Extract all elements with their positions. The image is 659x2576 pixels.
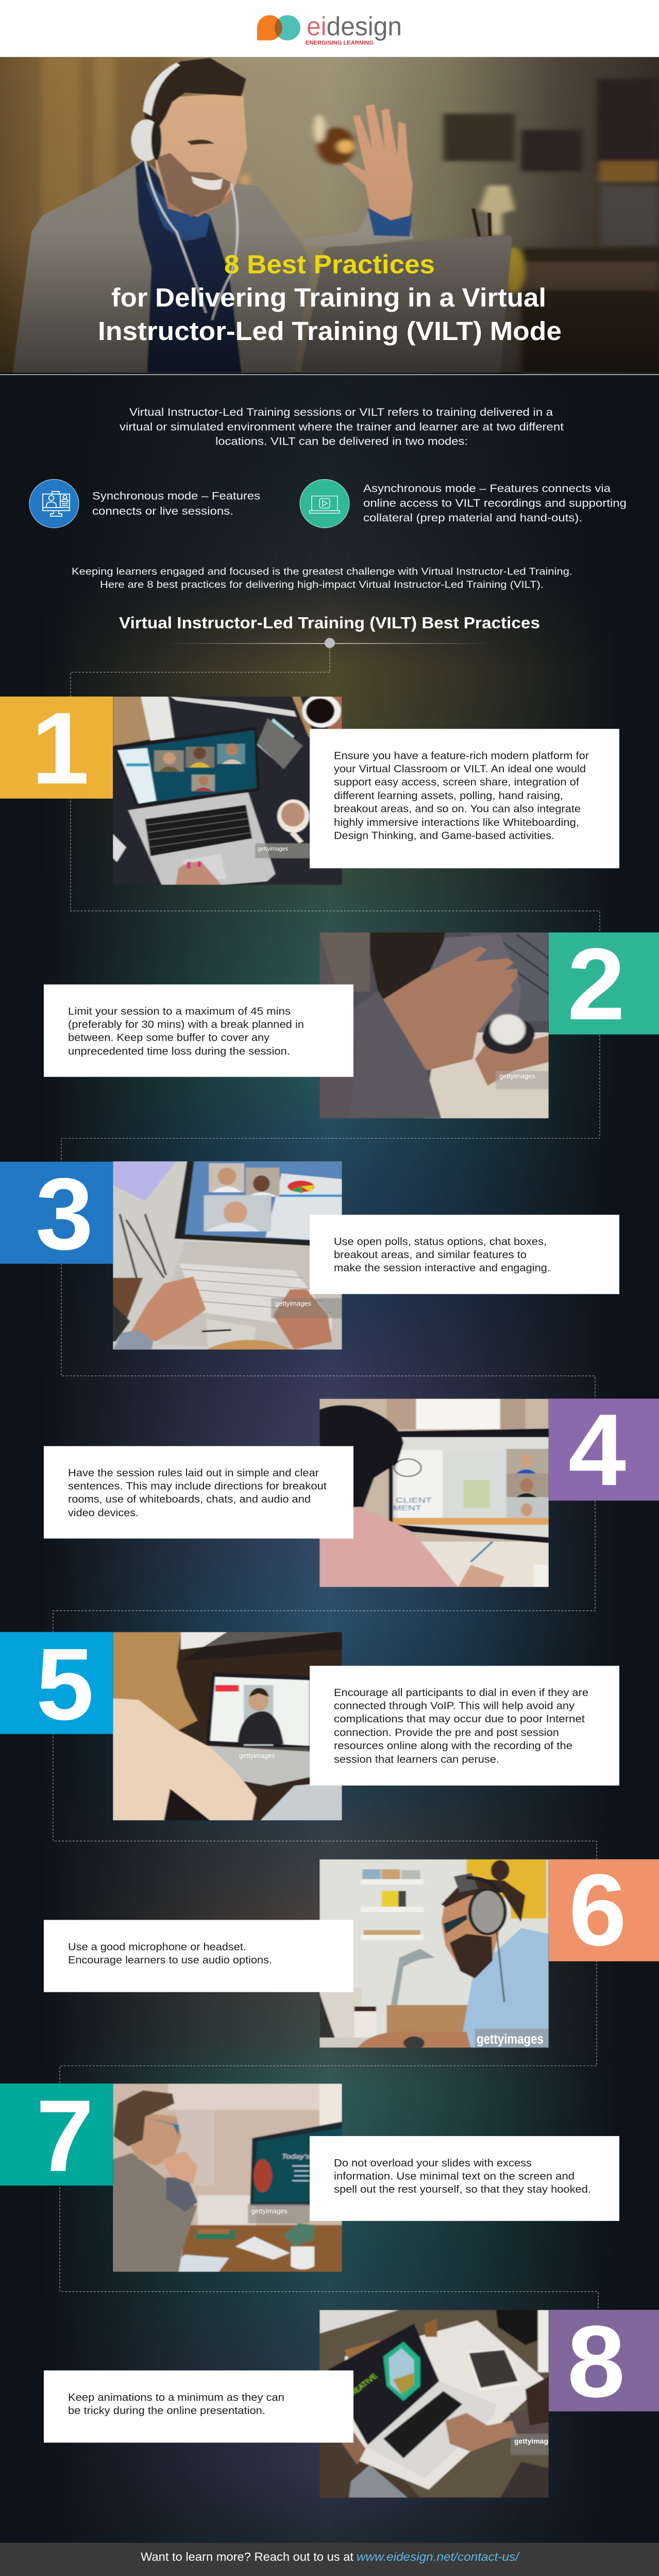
text card 5 — [310, 1666, 619, 1786]
text card 1: support easy access, screen share, integration of — [334, 776, 579, 788]
text card 4 — [44, 1446, 353, 1538]
text card 1: highly immersive interactions like Whiteboarding, — [334, 817, 579, 828]
intro text: Virtual Instructor-Led Training sessions or VILT refers to training delivered in a — [129, 405, 553, 418]
photo: smiling man with headset at laptop: gettyimages — [477, 2032, 544, 2047]
intro text — [120, 405, 564, 448]
jacket — [12, 160, 311, 372]
logo: eidesign: ENERGISING LEARNING — [306, 40, 374, 46]
panel 4 — [44, 1393, 659, 1587]
icon: laptop with play button — [300, 479, 349, 528]
text: asynchronous: collateral (prep material and hand-outs). — [363, 511, 582, 524]
asynchronous mode — [300, 479, 627, 528]
photo: man with glasses looking at monitor: Today's Dis — [282, 2154, 325, 2161]
photo: hand and wristwatch: gettyimages — [499, 1072, 535, 1080]
text card 5: connection. Provide the pre and post session — [334, 1727, 559, 1739]
photo: woman at monitor with whiteboard call — [319, 1399, 549, 1587]
panel 1 — [0, 691, 619, 885]
title — [98, 249, 562, 346]
engagement text: Here are 8 best practices for delivering high-impact Virtual Instructor-Led Training (VILT). — [100, 579, 544, 590]
text card 7: spell out the rest yourself, so that they stay hooked. — [334, 2183, 591, 2195]
photo: overhead laptop with presentation on white table: REATIVE — [348, 2372, 380, 2397]
panel 8 — [44, 2305, 659, 2498]
number badge 3: 3 — [36, 1157, 93, 1271]
text card 2: Limit your session to a maximum of 45 mins — [68, 1006, 291, 1018]
number badge 5 — [0, 1628, 113, 1741]
photo: smiling man with headset at laptop — [319, 1859, 549, 2049]
text card 5: connected through VoIP. This will help avoid any — [334, 1700, 575, 1712]
text card 8 — [44, 2370, 353, 2443]
text card 6 — [44, 1920, 353, 1992]
text card 8: be tricky during the online presentation. — [68, 2404, 265, 2416]
photo: woman watching recorded presenter on laptop — [113, 1632, 342, 1820]
footer bar: www.eidesign.net/contact-us/ — [357, 2550, 520, 2564]
hero bottom rule — [0, 374, 659, 375]
photo: man with glasses looking at monitor — [113, 2083, 342, 2272]
number badge 8 — [549, 2305, 659, 2419]
headphones — [143, 63, 180, 116]
number badge 5: 5 — [36, 1628, 94, 1741]
photo: woman at monitor with whiteboard call: MENT — [393, 1504, 421, 1512]
text card 3 — [310, 1215, 619, 1294]
title: for Delivering Training in a Virtual — [111, 283, 546, 312]
photo: laptop video call on desk: gettyimages — [258, 846, 289, 852]
engagement text: Keeping learners engaged and focused is the greatest challenge with Virtual Instructor-Led Training. — [72, 566, 572, 578]
number badge 2: 2 — [567, 927, 625, 1041]
photo: man with glasses looking at monitor: gettyimages — [251, 2207, 288, 2215]
number badge 7 — [0, 2079, 113, 2193]
text: synchronous: Synchronous mode – Features — [92, 489, 260, 502]
text card 3: make the session interactive and engaging. — [334, 1262, 550, 1274]
photo: overhead laptop with presentation on white table: gettyimage — [514, 2437, 552, 2445]
text card 6: Encourage learners to use audio options. — [68, 1954, 272, 1966]
text card 1 — [310, 729, 619, 868]
text card 2: between. Keep some buffer to cover any — [68, 1032, 270, 1044]
pens — [471, 209, 481, 236]
text card 4: rooms, use of whiteboards, chats, and audio and — [68, 1494, 311, 1505]
title: Instructor-Led Training (VILT) Mode — [98, 316, 562, 346]
title: 8 Best Practices — [224, 249, 435, 279]
text card 4: sentences. This may include directions for breakout — [68, 1480, 327, 1492]
text: asynchronous: Asynchronous mode – Features connects via — [363, 482, 611, 495]
text: asynchronous: online access to VILT recordings and supporting — [363, 497, 627, 509]
text card 7: Do not overload your slides with excess — [334, 2157, 532, 2169]
logo: eidesign — [257, 11, 402, 46]
panel 7 — [0, 2079, 619, 2272]
number badge 4 — [549, 1393, 659, 1507]
number badge 6 — [549, 1853, 659, 1967]
text card 1: Ensure you have a feature-rich modern platform for — [334, 750, 589, 761]
engagement text — [72, 566, 572, 590]
panel 5 — [0, 1628, 619, 1820]
text card 7 — [310, 2136, 619, 2221]
text card 5: session that learners can peruse. — [334, 1754, 499, 1766]
photo: laptop with group video call and pie chart — [113, 1161, 342, 1350]
logo: eidesign: eidesign — [307, 11, 402, 41]
text card 6: Use a good microphone or headset. — [68, 1941, 246, 1953]
laptop back — [300, 235, 512, 372]
text card 3: breakout areas, and similar features to — [334, 1249, 527, 1261]
footer bar: Want to learn more? Reach out to us at — [141, 2550, 353, 2564]
text card 5: complications that may occur due to poor Internet — [334, 1713, 585, 1725]
text card 2: (preferably for 30 mins) with a break planned in — [68, 1019, 304, 1030]
icon: video call monitor — [29, 479, 79, 528]
number badge 8: 8 — [567, 2305, 625, 2419]
panel 3 — [0, 1157, 619, 1350]
number badge 3 — [0, 1157, 113, 1271]
hand — [343, 104, 413, 221]
text card 2: unprecedented time loss during the session. — [68, 1045, 290, 1057]
photo: hand and wristwatch — [319, 931, 549, 1139]
text: synchronous: connects or live sessions. — [92, 504, 233, 517]
text: asynchronous — [363, 482, 627, 524]
hero photo: man with headphones waving — [0, 57, 659, 374]
text card 1: breakout areas, and so on. You can also integrate — [334, 803, 581, 815]
number badge 1: 1 — [31, 691, 89, 805]
number badge 6: 6 — [569, 1853, 627, 1967]
text card 5: resources online along with the recording of the — [334, 1740, 572, 1752]
number badge 2 — [549, 927, 659, 1041]
text card 3: Use open polls, status options, chat boxes, — [334, 1236, 547, 1248]
photo: woman at monitor with whiteboard call: CLIENT — [396, 1496, 432, 1504]
text card 1: Design Thinking, and Game-based activities. — [334, 830, 554, 841]
section heading: Virtual Instructor-Led Training (VILT) Best Practices — [119, 614, 540, 632]
text card 7: information. Use minimal text on the screen and — [334, 2171, 574, 2182]
text: synchronous — [92, 489, 260, 517]
text card 2 — [44, 985, 353, 1077]
photo: overhead laptop with presentation on white table — [319, 2310, 552, 2498]
text card 8: Keep animations to a minimum as they can — [68, 2392, 284, 2403]
text card 4: Have the session rules laid out in simple and clear — [68, 1467, 319, 1479]
intro text: locations. VILT can be delivered in two modes: — [215, 435, 468, 448]
text card 5: Encourage all participants to dial in even if they are — [334, 1687, 588, 1699]
hair — [143, 58, 246, 132]
neck and face — [160, 182, 232, 217]
dashed connector path — [53, 648, 600, 2310]
photo: laptop video call on desk — [113, 694, 342, 885]
text card 4: video devices. — [68, 1507, 139, 1519]
photo: woman watching recorded presenter on laptop: gettyimages — [239, 1752, 275, 1759]
panel 6 — [44, 1853, 659, 2049]
intro text: virtual or simulated environment where the trainer and learner are at two different — [120, 420, 564, 433]
panel 2 — [44, 927, 659, 1139]
number badge 1 — [0, 691, 113, 805]
text card 1: different learning assets, polling, hand raising, — [334, 790, 563, 802]
heading rule and dot — [165, 638, 495, 648]
synchronous mode — [29, 479, 260, 528]
shirt — [136, 160, 242, 372]
number badge 7: 7 — [36, 2079, 94, 2193]
photo: laptop with group video call and pie chart: gettyimages — [275, 1299, 311, 1307]
text card 1: your Virtual Classroom or VILT. An ideal one would — [334, 763, 586, 775]
number badge 4: 4 — [568, 1393, 626, 1507]
footer bar — [0, 2543, 659, 2576]
